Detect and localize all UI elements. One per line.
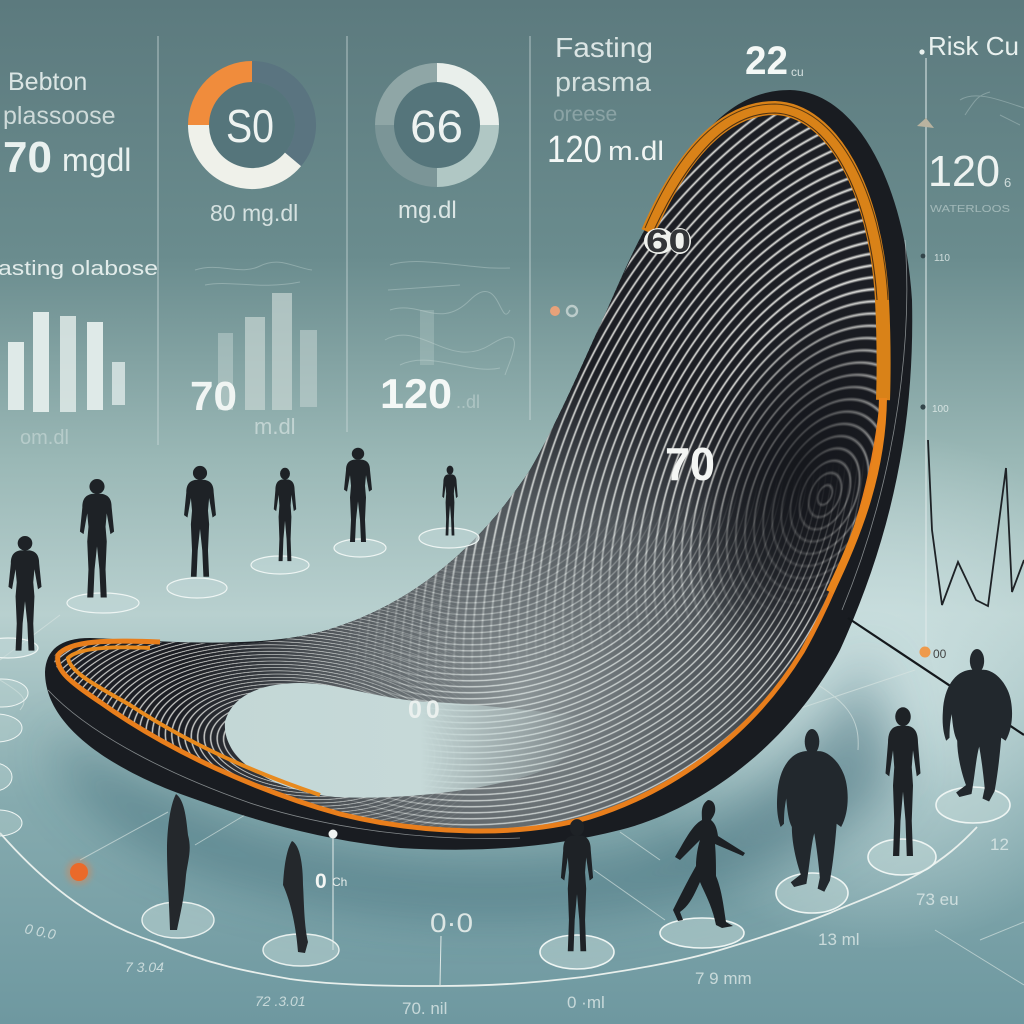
panel: fasting plasma: prasma [555,67,652,97]
person: woman [868,707,936,875]
panel: left plasma glucose stat: plassoose [3,102,116,130]
donut captions: 80 mg.dl [210,200,298,226]
diagonal risk line [848,618,1024,735]
left edge discs [0,679,28,836]
bar chart: left [8,312,125,449]
person: standing [540,819,614,969]
panel: fasting plasma: Fasting [555,32,653,63]
panel: fasting plasma: 120 [547,129,602,171]
donut captions: mg.dl [398,197,457,224]
sketch chart: right [380,262,514,417]
person 4 [251,468,309,574]
value labels on curve: cu [791,65,804,79]
central opening [225,683,586,798]
rim highlight lines [48,240,907,839]
value labels on curve: 22 [745,39,788,83]
floor shadow [59,650,900,912]
panel: risk curve axis [917,31,1024,650]
tick labels: 72 .3.01 [255,993,306,1009]
tick labels: 70. nil [402,999,447,1018]
front row of people [142,649,1012,969]
panel: left plasma glucose stat: mgdl [62,142,131,178]
panel: left plasma glucose stat [3,68,131,182]
back row of people [0,448,479,658]
tick labels: 73 eu [916,890,959,909]
floor axis [0,615,1024,986]
panel: risk curve axis: WATERLOOS [930,204,1010,215]
panel: left plasma glucose stat: Bebton [8,68,87,96]
spike line chart [928,440,1024,606]
heading: fasting glucose: asting olabose [0,258,158,280]
person 6 [419,466,479,548]
panel: risk curve axis: 6 [1004,175,1011,190]
panel: fasting plasma: m.dl [608,136,664,166]
person 3 [167,466,227,598]
panel: risk curve axis: 100 [932,404,949,415]
donut chart: 66 [384,72,490,178]
person: tapered figure 2 [263,841,339,966]
sketch chart: right: 120 [380,370,452,417]
orange band [58,104,888,831]
panel: fasting plasma [547,32,664,316]
panel: risk curve axis: Risk Cu [928,31,1019,61]
tick labels: 7 9 mm [695,969,752,988]
tick labels: 0 ·ml [567,993,605,1012]
value labels on curve: 60 [646,223,691,259]
panel: risk curve axis: 110 [934,253,950,264]
bar chart: middle: m.dl [254,414,296,439]
marker: lower curve value: Ch [332,875,347,889]
tick labels [23,835,1009,1018]
donut chart: 66: 66 [410,101,463,152]
panel: fasting plasma: oreese [553,103,617,126]
value labels on curve: 00 [408,696,444,724]
marker: lower curve value: 0·0 [430,908,473,938]
marker: lower curve value: 0 [315,870,327,893]
person: tapered figure 1 [142,794,214,938]
tick labels: 7 3.04 [125,959,164,975]
bar chart: middle [190,262,317,439]
bar chart: middle: 70 [190,373,237,419]
person: large figure 2 [936,649,1012,823]
orange marker dot [66,859,92,885]
person 2 [67,479,139,613]
diagonal risk line: 00 [933,647,947,661]
risk curve shape [45,90,912,850]
contour line texture [54,115,879,828]
donut captions [210,197,457,226]
donut chart: 50: S0 [226,100,274,152]
tick labels: 13 ml [818,930,860,949]
value labels on curve: 70 [665,438,715,490]
outer dark rim [45,90,912,850]
panel: left plasma glucose stat: 70 [3,133,52,182]
person 1 [0,536,42,658]
tick labels: 0 0.0 [23,920,57,942]
person: large figure 1 [776,729,848,913]
bar chart: left: om.dl [20,427,69,449]
person 5 [334,448,386,557]
value labels on curve [408,39,804,724]
person: walking [660,800,745,948]
panel: risk curve axis: 120 [928,147,1000,196]
marker: lower curve value [315,830,473,985]
donut chart: 50 [198,71,306,179]
panel dividers [158,36,530,445]
tick labels: 12 [990,835,1009,854]
sketch chart: right: ..dl [456,392,480,412]
